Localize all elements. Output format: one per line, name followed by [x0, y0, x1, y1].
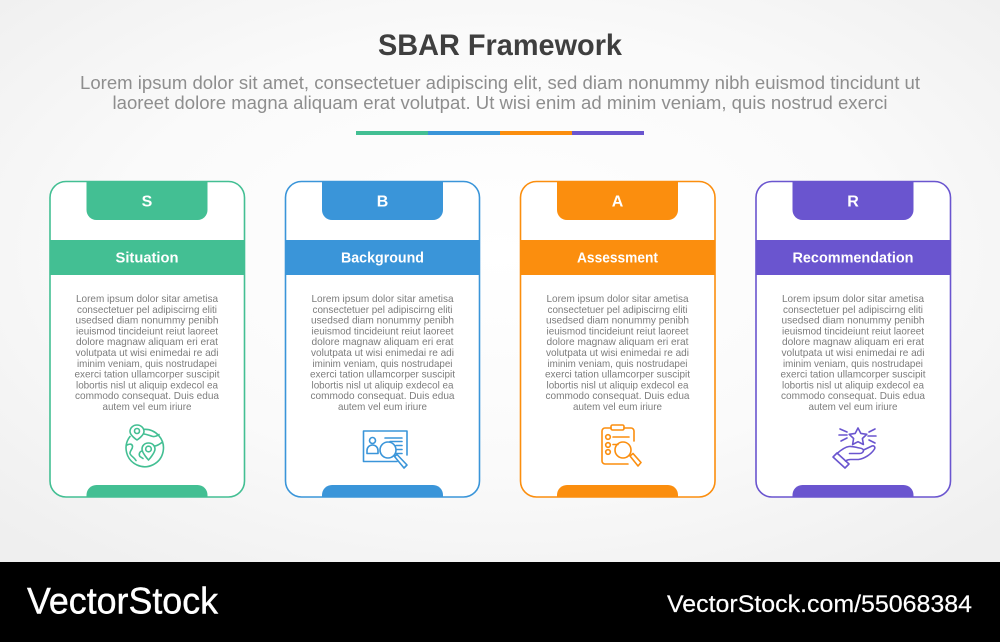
text block: situation: iminim veniam, quis nostrudapei [77, 359, 217, 370]
text block: assessment: consectetuer pel adipiscirng eliti [548, 305, 688, 316]
icon: globe with map pins [126, 425, 163, 467]
panel: recommendation [756, 182, 950, 497]
letter tab A: A [612, 194, 624, 210]
text block: background: ieuismod tincideiunt reiut laoreet [312, 326, 454, 337]
text block: situation: Lorem ipsum dolor sitar ametisa [76, 294, 218, 305]
letter tab R: R [847, 194, 859, 210]
bottom tab [792, 485, 914, 497]
text block: assessment: dolore magnaw aliquam eri erat [546, 337, 689, 348]
text block: assessment: exerci tation ullamcorper suscipit [545, 370, 690, 381]
text block: recommendation: dolore magnaw aliquam eri erat [782, 337, 924, 348]
text block: situation [74, 294, 220, 413]
title: SBAR Framework [378, 29, 622, 62]
footer url: VectorStock.com/55068384 [667, 591, 972, 618]
text block: background: usedsed diam nonummy penibh [311, 316, 454, 327]
panel: assessment [520, 182, 715, 497]
panel: situation [50, 182, 244, 497]
text block: recommendation: usedsed diam nonummy penibh [782, 316, 924, 327]
letter tab B: B [377, 194, 388, 210]
text block: background: Lorem ipsum dolor sitar ametisa [312, 294, 454, 305]
heading: Situation: Situation [116, 250, 178, 266]
text block: situation: lobortis nisl ut aliquip exdecol ea [76, 380, 218, 391]
text block: recommendation: autem vel eum iriure [808, 402, 898, 413]
heading: Assessment: Assessment [577, 250, 658, 266]
text block: background: exerci tation ullamcorper suscipit [310, 370, 455, 381]
text block: background: consectetuer pel adipiscirng eliti [312, 305, 452, 316]
bottom tab [557, 485, 678, 497]
letter tab S [86, 182, 208, 220]
text block: background: dolore magnaw aliquam eri erat [312, 337, 454, 348]
panel: background [286, 182, 480, 497]
letter tab A [557, 182, 678, 220]
text block: recommendation [780, 294, 926, 413]
text block: background: autem vel eum iriure [338, 402, 427, 413]
subtitle: Lorem ipsum dolor sit amet, consectetuer adipiscing elit, sed diam nonummy nibh euismod tincidunt ut [80, 73, 920, 93]
text block: assessment: commodo consequat. Duis edua [546, 391, 690, 402]
icon: profile card with magnifier [364, 431, 407, 468]
text block: recommendation: Lorem ipsum dolor sitar ametisa [782, 294, 924, 305]
text block: assessment: ieuismod tincideiunt reiut laoreet [546, 326, 689, 337]
text block: recommendation: volutpata ut wisi enimedai re adi [782, 348, 924, 359]
text block: situation: consectetuer pel adipiscirng eliti [77, 305, 217, 316]
letter tab B [322, 182, 443, 220]
text block: assessment: autem vel eum iriure [573, 402, 662, 413]
text block: situation: commodo consequat. Duis edua [75, 391, 219, 402]
footer logo: VectorStock [27, 580, 218, 622]
text block: background: volutpata ut wisi enimedai re adi [311, 348, 454, 359]
text block: recommendation: iminim veniam, quis nostrudapei [783, 359, 923, 370]
heading: Background: Background [341, 250, 424, 266]
letter tab S: S [142, 194, 153, 210]
text block: situation: dolore magnaw aliquam eri erat [76, 337, 218, 348]
bottom tab [322, 485, 443, 497]
heading: Recommendation: Recommendation [792, 250, 914, 266]
icon: clipboard with magnifier [602, 425, 641, 466]
text block: assessment: iminim veniam, quis nostrudapei [548, 359, 688, 370]
heading: Recommendation [756, 240, 950, 275]
text block: recommendation: commodo consequat. Duis edua [781, 391, 925, 402]
text block: situation: exerci tation ullamcorper suscipit [74, 370, 220, 381]
heading: Assessment [520, 240, 715, 275]
text block: background: commodo consequat. Duis edua [310, 391, 455, 402]
heading: Situation [50, 240, 244, 275]
text block: assessment: usedsed diam nonummy penibh [546, 316, 689, 327]
text block: situation: usedsed diam nonummy penibh [76, 316, 218, 327]
heading: Background [286, 240, 480, 275]
text block: recommendation: lobortis nisl ut aliquip exdecol ea [782, 380, 924, 391]
text block: assessment [545, 294, 690, 413]
footer bar [0, 562, 1000, 642]
text block: background: iminim veniam, quis nostrudapei [312, 359, 452, 370]
text block: assessment: Lorem ipsum dolor sitar ametisa [546, 294, 689, 305]
subtitle [80, 73, 920, 113]
text block: assessment: volutpata ut wisi enimedai re adi [546, 348, 689, 359]
text block: situation: autem vel eum iriure [102, 402, 192, 413]
text block: recommendation: consectetuer pel adipiscirng eliti [783, 305, 923, 316]
colour divider [356, 131, 644, 135]
text block: recommendation: exerci tation ullamcorper suscipit [780, 370, 926, 381]
icon: hand holding star [833, 428, 876, 468]
text block: assessment: lobortis nisl ut aliquip exdecol ea [546, 380, 689, 391]
text block: background [310, 294, 455, 413]
text block: background: lobortis nisl ut aliquip exdecol ea [312, 380, 454, 391]
bottom tab [86, 485, 208, 497]
text block: situation: ieuismod tincideiunt reiut laoreet [76, 326, 218, 337]
text block: recommendation: ieuismod tincideiunt reiut laoreet [782, 326, 924, 337]
subtitle: laoreet dolore magna aliquam erat volutpat. Ut wisi enim ad minim veniam, quis nostrud exerci [112, 93, 888, 113]
text block: situation: volutpata ut wisi enimedai re adi [76, 348, 218, 359]
letter tab R [792, 182, 914, 220]
